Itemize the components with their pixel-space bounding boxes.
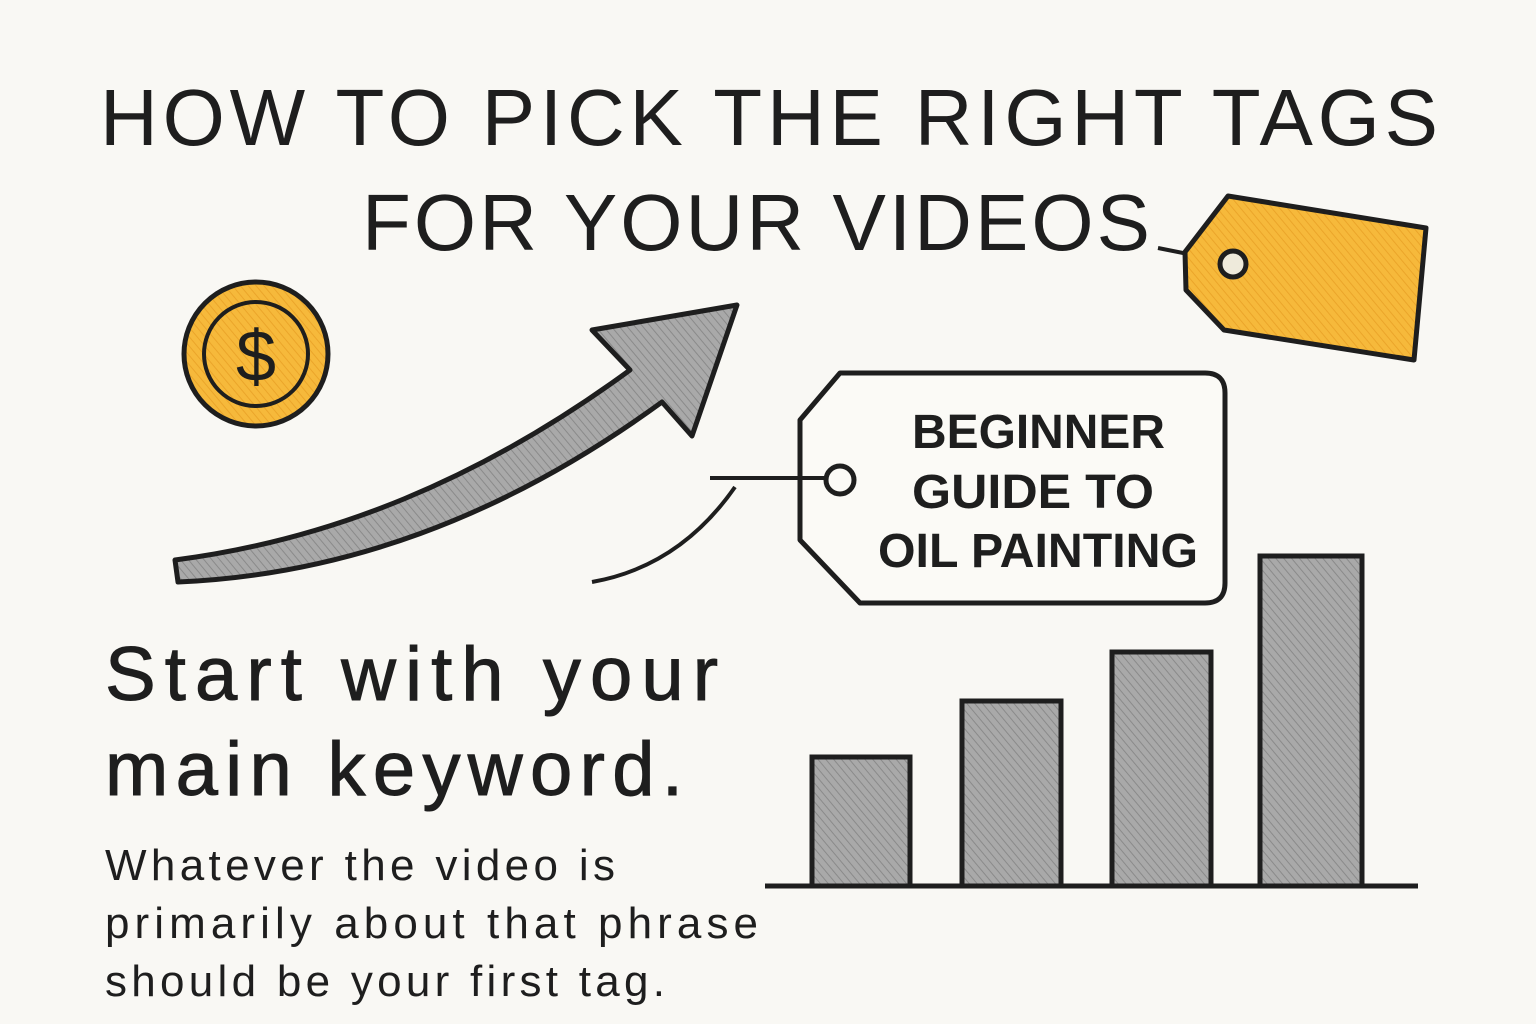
title — [100, 73, 1438, 267]
title: FOR YOUR VIDEOS — [362, 178, 1150, 267]
bar chart — [765, 556, 1418, 886]
icon: dollar coin: $ — [236, 317, 276, 397]
heading: start with your main keyword — [105, 632, 718, 812]
arrow: growth — [175, 305, 737, 582]
title: HOW TO PICK THE RIGHT TAGS — [100, 73, 1438, 162]
text block: explanation: Whatever the video is — [105, 841, 615, 890]
tag: keyword example — [592, 373, 1225, 603]
text block: explanation: should be your first tag. — [105, 957, 665, 1006]
text block: explanation — [105, 841, 758, 1006]
text block: explanation: primarily about that phrase — [105, 899, 758, 948]
icon: dollar coin — [184, 282, 328, 426]
tag: keyword example: BEGINNER — [912, 406, 1165, 459]
heading: start with your main keyword: Start with your — [105, 632, 718, 717]
tag: keyword example: GUIDE TO — [912, 466, 1154, 519]
heading: start with your main keyword: main keyword. — [105, 727, 683, 812]
icon: yellow price tag — [1158, 196, 1426, 360]
tag: keyword example: OIL PAINTING — [878, 525, 1198, 578]
